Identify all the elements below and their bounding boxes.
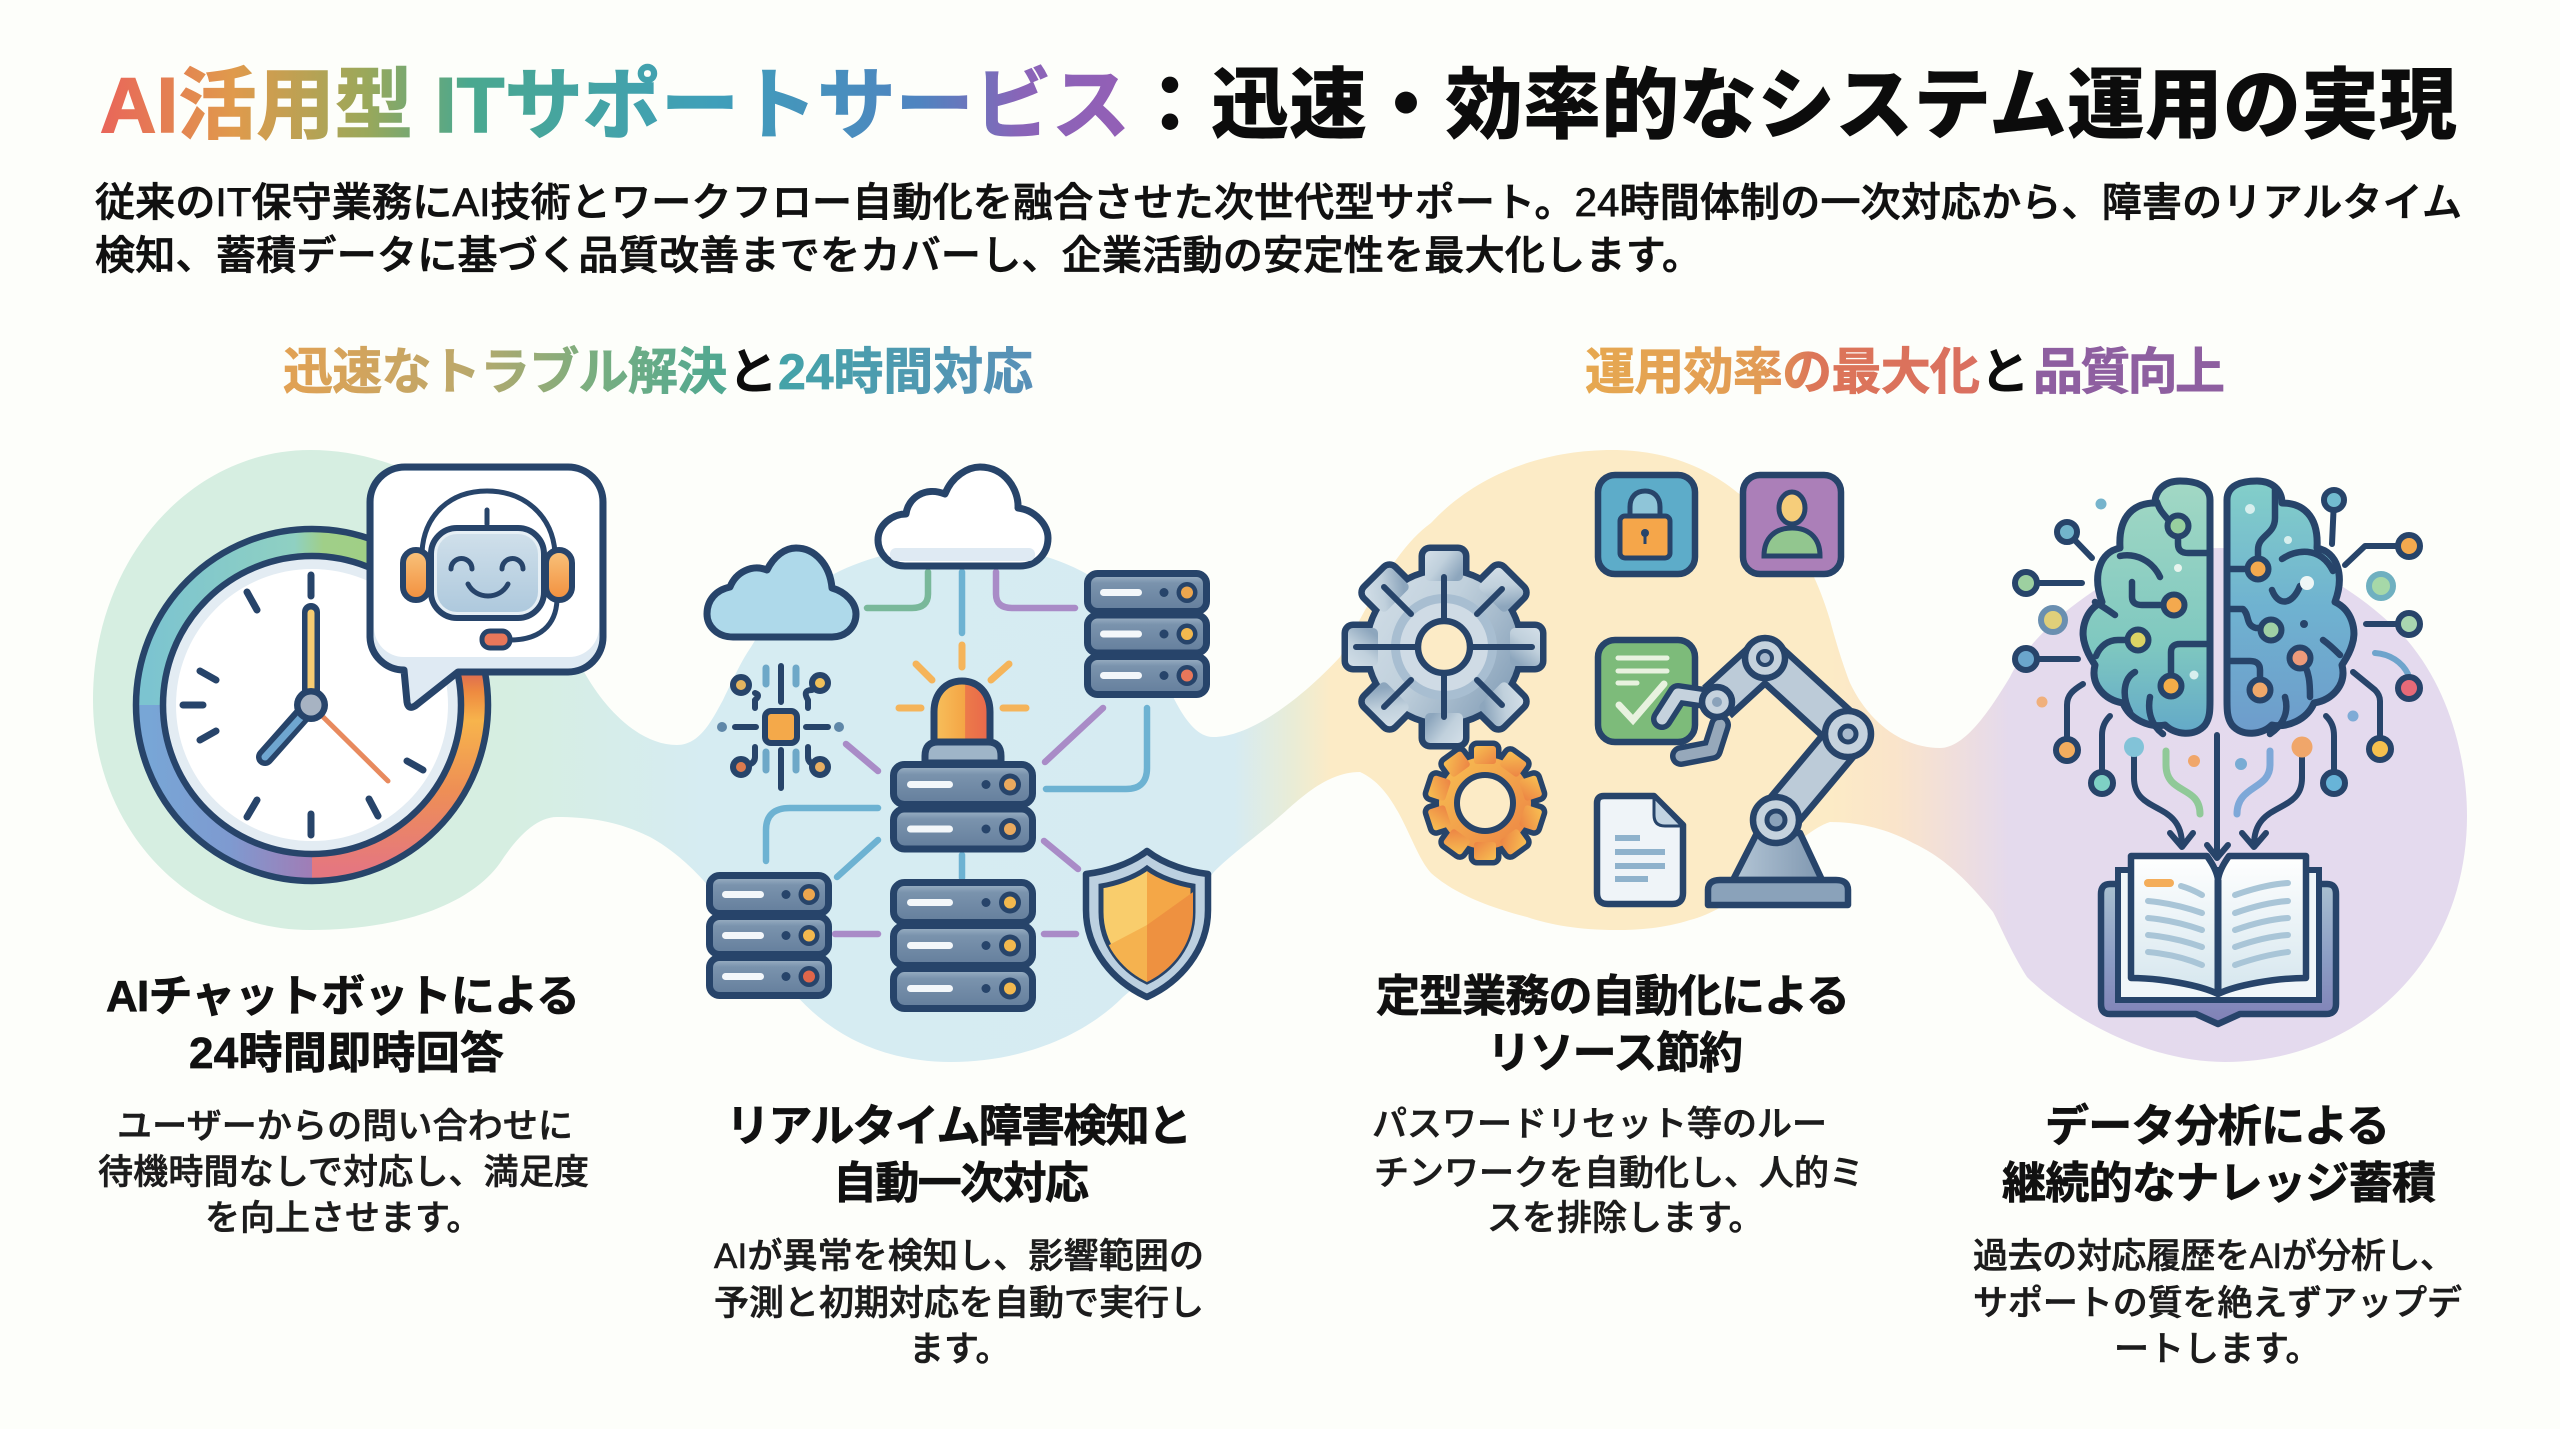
card 3 heading: 定型業務の自動化による	[1376, 972, 1850, 1021]
robot arm	[1662, 638, 1871, 905]
card 2 body: ます。	[909, 1330, 1011, 1369]
title: AI活用型 ITサポートサービス	[100, 61, 1130, 149]
small gear	[1427, 746, 1543, 860]
section heading: efficiency and quality: と	[1980, 344, 2030, 400]
card 3 heading	[1376, 972, 1850, 1078]
card 4 body	[1973, 1237, 2462, 1369]
card 2 body	[714, 1237, 1204, 1369]
card 1 heading: AIチャットボットによる	[106, 972, 580, 1021]
card 2 heading: 自動一次対応	[833, 1159, 1089, 1208]
card 3: routine automation	[1372, 972, 1864, 1238]
card 3 body	[1372, 1105, 1864, 1238]
lock tile	[1598, 475, 1695, 574]
cloud: left	[707, 548, 856, 637]
card 1 body: ユーザーからの問い合わせに	[117, 1107, 573, 1146]
brain	[2083, 481, 2354, 734]
server: top right	[1088, 574, 1206, 694]
clock outlines	[136, 529, 488, 881]
card 4 heading: 継続的なナレッジ蓄積	[2002, 1159, 2436, 1208]
user tile	[1743, 475, 1841, 574]
section heading: quick resolution and 24h response: と	[728, 344, 778, 400]
clock hands	[265, 612, 388, 781]
icon: AI brain feeding knowledge book	[2015, 481, 2420, 1024]
section heading: efficiency and quality: 運用効率の最大化	[1585, 344, 1980, 400]
card 3 body: スを排除します。	[1487, 1199, 1764, 1238]
card 2 body: 予測と初期対応を自動で実行し	[714, 1284, 1204, 1323]
icon: gears, automation tiles and robot arm	[1348, 475, 1871, 905]
alarm light	[925, 681, 1001, 763]
clock ticks	[183, 575, 423, 835]
clock face	[163, 556, 461, 854]
AI chip	[717, 666, 844, 788]
card 2 heading: リアルタイム障害検知と	[726, 1102, 1192, 1151]
card 1 body	[98, 1107, 589, 1238]
title	[100, 61, 2457, 149]
connector lines	[766, 572, 1147, 934]
section heading: efficiency and quality	[1585, 344, 2225, 400]
card 4 body: ートします。	[2114, 1330, 2321, 1369]
card 2: real-time detection	[714, 1102, 1204, 1369]
card 3 heading: リソース節約	[1487, 1029, 1743, 1078]
chatbot head	[403, 491, 572, 648]
card 1 heading: 24時間即時回答	[189, 1029, 504, 1078]
shield	[1086, 851, 1210, 997]
card 1: AI chatbot	[98, 972, 589, 1238]
cloud: top	[878, 467, 1048, 566]
card 4 heading	[2002, 1102, 2436, 1208]
server: alarm	[894, 764, 1032, 849]
card 3 body: パスワードリセット等のルー	[1372, 1105, 1827, 1144]
card 2 body: AIが異常を検知し、影響範囲の	[714, 1237, 1204, 1276]
clock rainbow ring	[149, 542, 475, 868]
section heading: quick resolution and 24h response	[283, 344, 1033, 400]
card 4: knowledge accumulation	[1973, 1102, 2462, 1369]
circuit lines and nodes	[2015, 490, 2420, 794]
server: bottom center	[894, 882, 1032, 1008]
intro text: 従来のIT保守業務にAI技術とワークフロー自動化を融合させた次世代型サポート。24時間体制の一次対応から、障害のリアルタイム	[95, 181, 2462, 225]
card 4 body: サポートの質を絶えずアップデ	[1973, 1284, 2462, 1323]
arrows to book	[2124, 735, 2312, 858]
checklist tile	[1598, 640, 1695, 742]
card 1 body: 待機時間なしで対応し、満足度	[98, 1153, 589, 1192]
icon: server network with alarm	[707, 467, 1210, 1008]
intro text	[95, 181, 2462, 278]
large gear	[1348, 551, 1540, 743]
section heading: efficiency and quality: 品質向上	[2033, 344, 2225, 400]
card 4 heading: データ分析による	[2045, 1102, 2390, 1151]
card 1 heading	[106, 972, 580, 1078]
section heading: quick resolution and 24h response: 24時間対応	[778, 344, 1033, 400]
background wave band	[93, 450, 2467, 1062]
card 4 body: 過去の対応履歴をAIが分析し、	[1973, 1237, 2455, 1276]
title: 迅速・効率的なシステム運用の実現	[1211, 61, 2457, 149]
document icon	[1597, 796, 1683, 904]
icon: clock with chatbot bubble	[136, 467, 603, 881]
title: ：	[1131, 61, 1209, 149]
card 3 body: チンワークを自動化し、人的ミ	[1374, 1154, 1864, 1193]
card 2 heading	[726, 1102, 1192, 1208]
section heading: quick resolution and 24h response: 迅速なトラブル解決	[283, 344, 727, 400]
alarm rays	[899, 645, 1026, 708]
intro text: 検知、蓄積データに基づく品質改善までをカバーし、企業活動の安定性を最大化します。	[95, 234, 1702, 278]
open book	[2101, 856, 2336, 1024]
server: bottom left	[710, 876, 828, 996]
card 1 body: を向上させます。	[205, 1199, 482, 1238]
speech bubble	[370, 467, 603, 707]
